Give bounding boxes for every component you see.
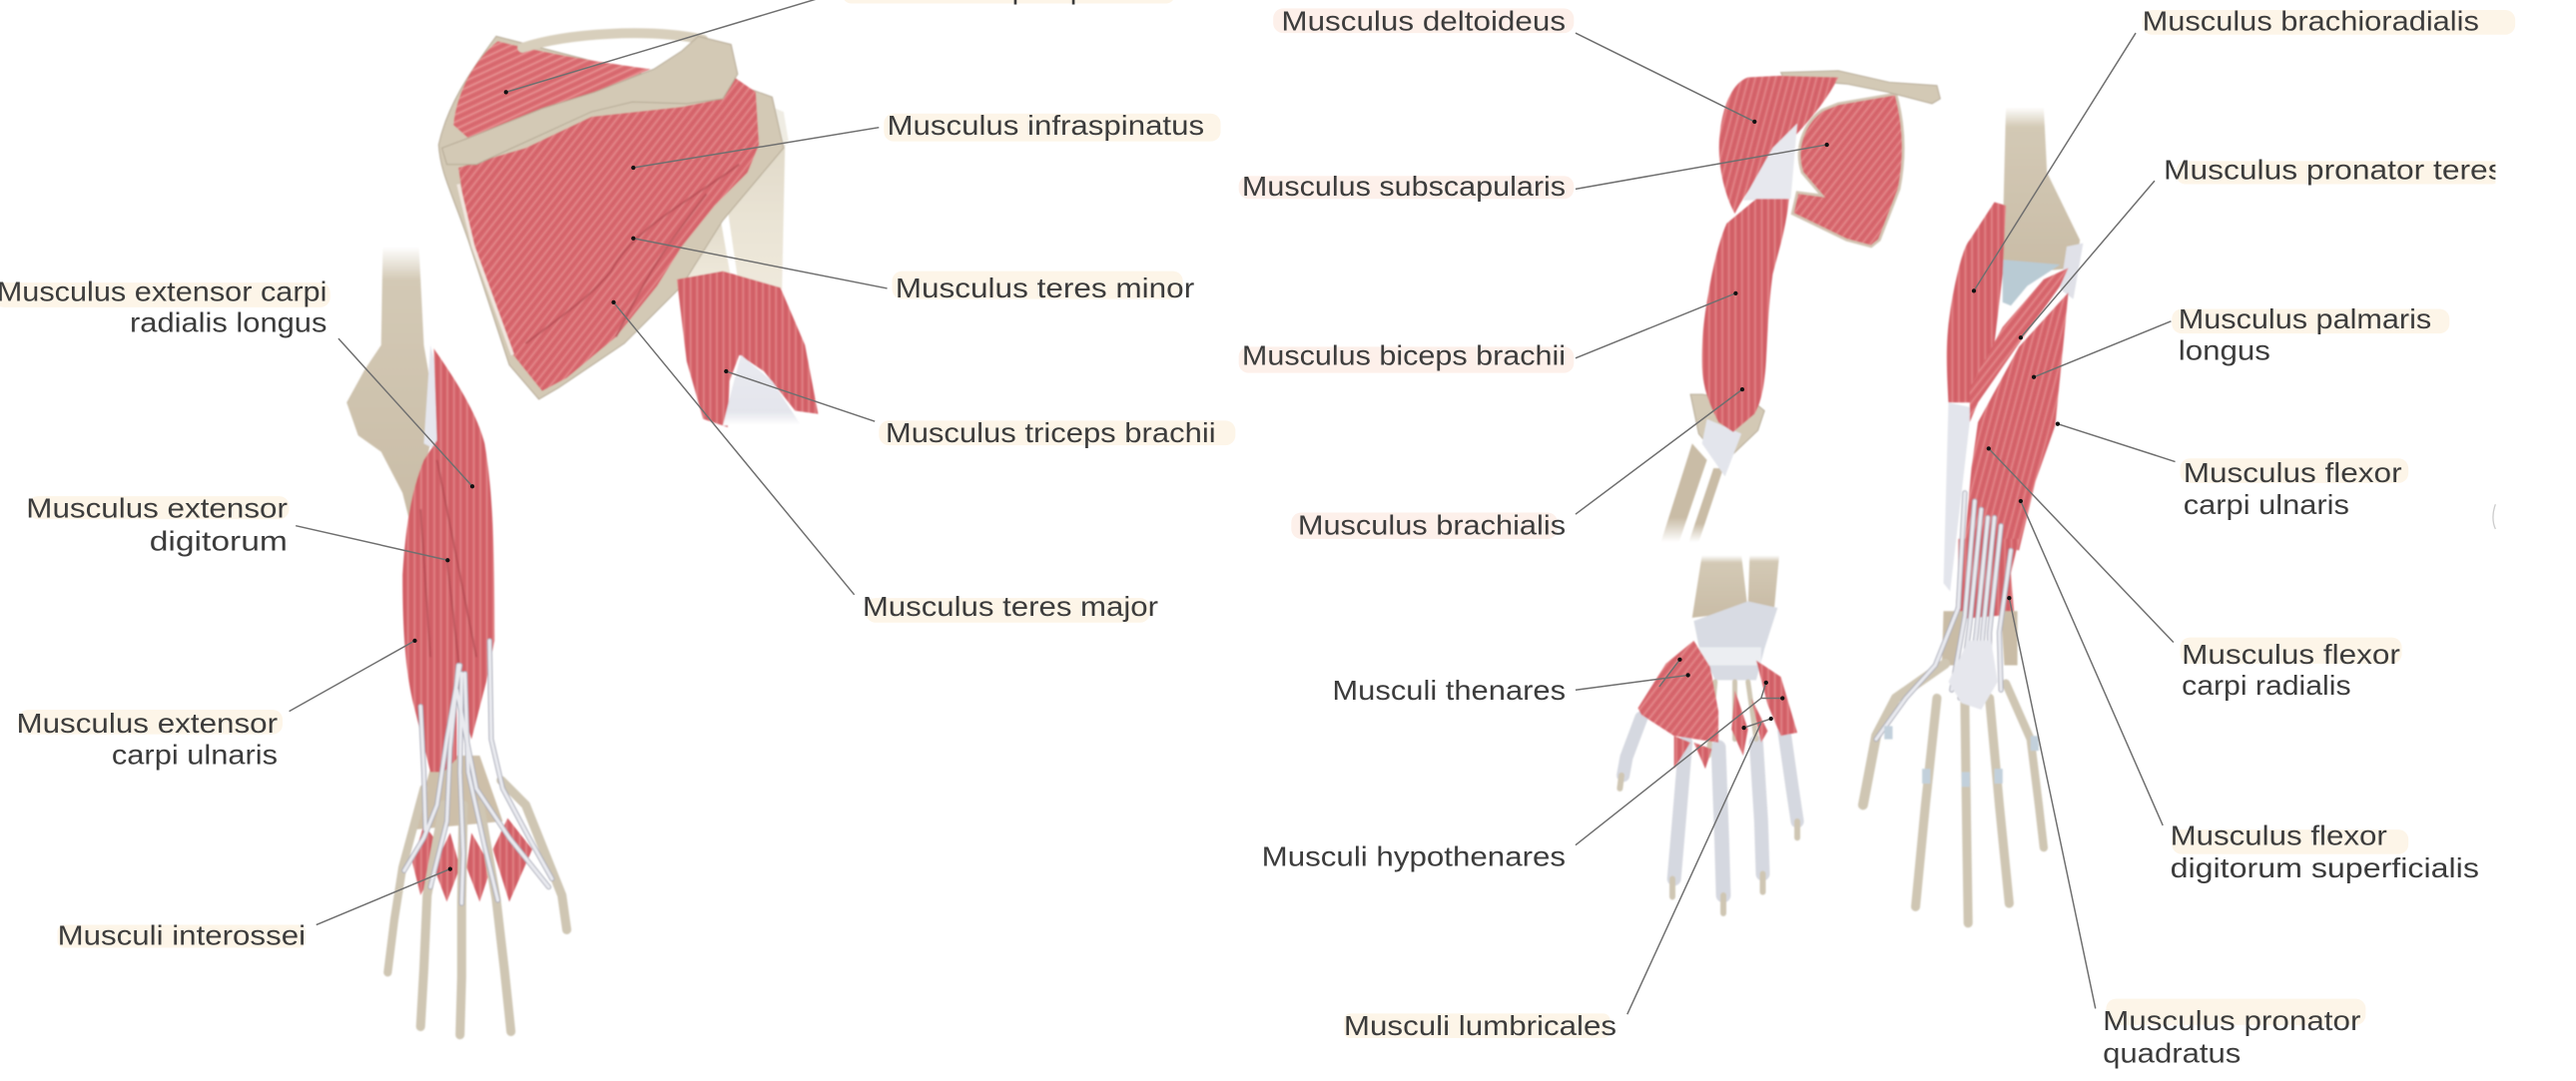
label: Musculus flexor carpi radialis [2180, 638, 2402, 701]
label: Musculus flexor carpi ulnaris: Musculus flexor [2184, 457, 2402, 488]
muscle: biceps and brachialis [1702, 199, 1789, 432]
bones: fingers [1863, 664, 2044, 923]
bone: distal humerus and elbow [346, 247, 433, 526]
metacarpal shafts [1708, 682, 1756, 756]
label: Musculus flexor digitorum superficialis: Musculus flexor [2171, 820, 2387, 851]
illustration: posterior shoulder and scapula [438, 33, 818, 427]
label: Musculus flexor carpi radialis: Musculus flexor [2182, 639, 2400, 670]
muscle: hypothenar group [1756, 661, 1797, 736]
label: Musculus extensor digitorum [26, 492, 290, 556]
label: Musculus extensor carpi ulnaris: Musculus extensor [16, 708, 278, 739]
muscle separations [526, 165, 739, 343]
muscle: pronator quadratus and deep flexors [1955, 539, 2019, 619]
label: Musculus biceps brachii: Musculus biceps brachii [1242, 339, 1566, 370]
label: Musculus flexor carpi ulnaris: carpi ulnaris [2184, 489, 2349, 520]
label: Musculus extensor digitorum: Musculus extensor [26, 492, 288, 523]
label: Musculus subscapularis: Musculus subscapularis [1242, 171, 1566, 202]
label: Musculus palmaris longus [2172, 303, 2449, 366]
label: Musculus teres minor: Musculus teres minor [896, 272, 1194, 303]
bones: radius and ulna [1692, 555, 1748, 618]
label: Musculus extensor carpi radialis longus [0, 275, 330, 338]
joints [1884, 726, 2039, 787]
muscle: triceps brachii [677, 271, 818, 427]
illustration: anterior forearm and hand [1863, 107, 2083, 923]
illustration: posterior forearm and hand [346, 247, 567, 1035]
label: Musculus pronator quadratus [2103, 999, 2365, 1069]
label: Musculus extensor carpi ulnaris [16, 708, 283, 770]
fingers [1623, 718, 1797, 895]
muscle: deltoid [1719, 76, 1838, 214]
label: Musculus pronator quadratus: quadratus [2103, 1038, 2241, 1069]
bone: distal humerus [2003, 107, 2080, 274]
tendon: biceps long head [1743, 124, 1797, 201]
label: Musculi hypothenares: Musculi hypothenares [1262, 840, 1566, 871]
label: Musculus pronator quadratus: Musculus pronator [2103, 1005, 2360, 1036]
label: Musculus triceps brachii: Musculus triceps brachii [886, 417, 1216, 448]
tendon: biceps distal [1702, 419, 1741, 476]
bones: wrist and metacarpals [414, 756, 502, 829]
bone: clavicle [522, 33, 703, 48]
fingertip bones [1619, 776, 1797, 913]
bone: scapula [438, 36, 784, 399]
label: Musculus flexor carpi radialis: carpi radialis [2182, 670, 2351, 701]
bone: humerus shafts [677, 102, 789, 289]
label: Musculus palmaris longus: longus [2179, 335, 2270, 366]
label: Musculus extensor carpi ulnaris: carpi ulnaris [112, 739, 278, 770]
label: Musculus teres major: Musculus teres major [863, 591, 1158, 622]
ligament: elbow capsule [2003, 260, 2060, 305]
label: Musculi lumbricales: Musculi lumbricales [1344, 1010, 1616, 1041]
bone: elbow [1690, 394, 1764, 463]
bone: radial tendon strip [2060, 244, 2083, 299]
label: Musculus infraspinatus: Musculus infraspinatus [888, 110, 1204, 141]
label: Musculus extensor carpi radialis longus: Musculus extensor carpi [0, 275, 326, 306]
ligaments: carpal [1693, 601, 1777, 680]
muscle: supraspinatus [453, 41, 651, 138]
illustration: anterior shoulder and arm [1661, 71, 1940, 542]
muscle: lumbricals [1674, 690, 1767, 769]
bone: acromion and scapular spine [442, 36, 738, 165]
muscle separations [420, 460, 476, 674]
label: Musculi interossei: Musculi interossei [58, 919, 306, 950]
bones: fingers [387, 781, 567, 1035]
tendons: flexor fan [1876, 493, 2011, 740]
bones: wrist and carpals [1942, 611, 2018, 666]
label: Musculus pronator teres: Musculus pronator teres [2164, 155, 2504, 186]
label: Musculus palmaris longus: Musculus palmaris [2179, 303, 2431, 334]
muscle: forearm extensors [402, 348, 494, 773]
tendons near the elbow [424, 345, 443, 452]
muscle: interossei [412, 818, 532, 901]
label: Musculus brachioradialis: Musculus brachioradialis [2143, 6, 2479, 37]
muscle: pronator teres [1970, 268, 2069, 422]
tendons: extensor fan [404, 641, 552, 903]
label: Musculus brachialis: Musculus brachialis [1298, 510, 1566, 541]
label: Musculus flexor carpi ulnaris [2180, 457, 2408, 520]
muscle: thenar group [1637, 641, 1718, 743]
faint edge mark [2493, 504, 2495, 529]
tendon: triceps [723, 355, 800, 425]
label: Musculus flexor digitorum superficialis [2171, 820, 2479, 883]
leader lines and anchor dots [290, 0, 2176, 1014]
muscle: brachioradialis [1947, 203, 2006, 402]
label: Musculus flexor digitorum superficialis: digitorum superficialis [2171, 852, 2479, 883]
label: Musculus extensor carpi radialis longus: radialis longus [130, 307, 326, 338]
bone: clavicle [1781, 71, 1940, 104]
label: Musculus deltoideus: Musculus deltoideus [1281, 6, 1566, 37]
palmar aponeurosis [1948, 641, 1998, 710]
muscle: flexor group [1965, 292, 2069, 550]
pale tendon edge of scapula [458, 184, 512, 355]
retinaculum [1698, 647, 1761, 666]
label: Musculus extensor digitorum: digitorum [150, 525, 288, 556]
muscle: infraspinatus [458, 77, 759, 391]
label: Musculi thenares: Musculi thenares [1332, 675, 1566, 706]
tendons: proximal flexor [1944, 402, 1971, 592]
muscle: subscapularis [1792, 94, 1903, 247]
illustration: anterior hand [1619, 555, 1797, 913]
bones: forearm [1661, 443, 1707, 542]
